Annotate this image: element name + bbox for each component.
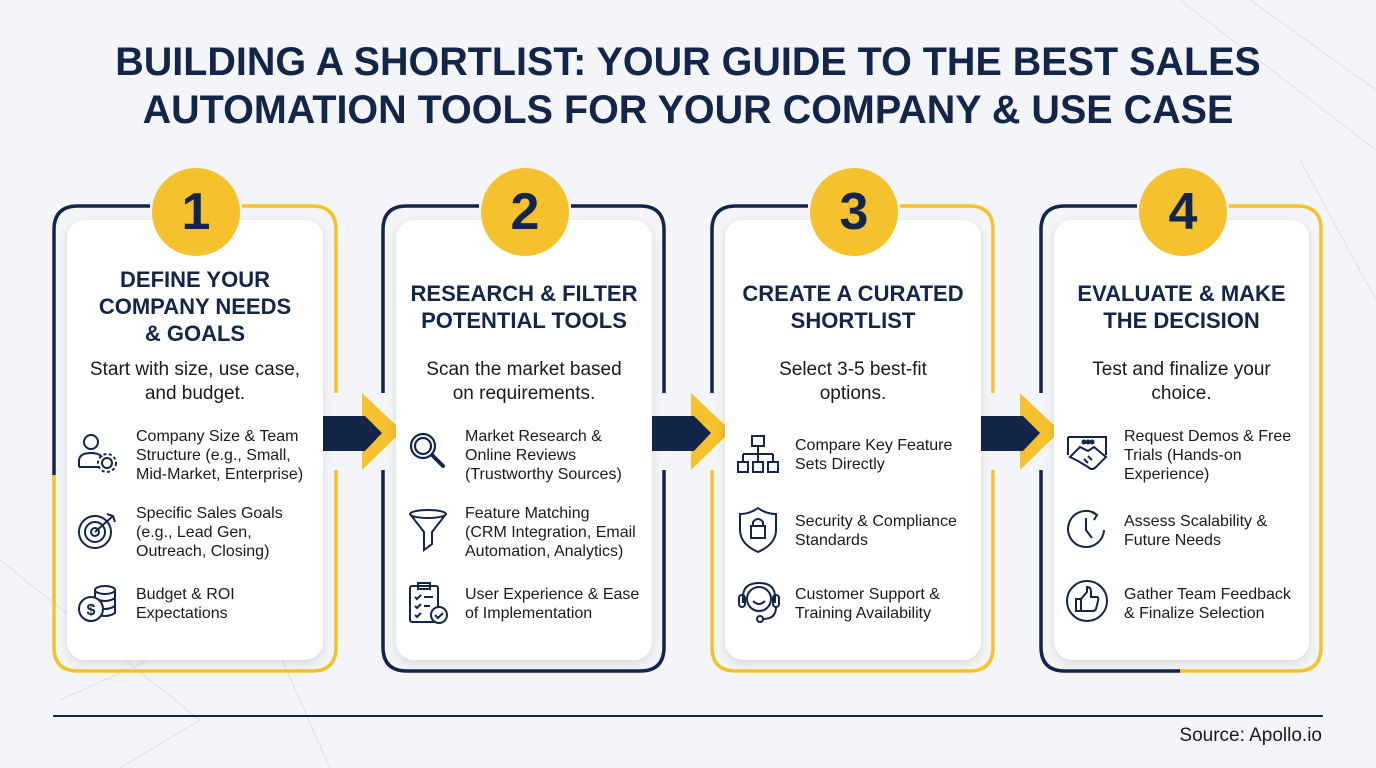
item: feature matching: Feature Matching xyxy=(465,505,590,522)
item: team feedback xyxy=(1066,580,1291,622)
subtext 4 xyxy=(1092,359,1271,404)
title: BUILDING A SHORTLIST: YOUR GUIDE TO THE BEST SALES xyxy=(115,40,1261,84)
icon: handshake screen xyxy=(1067,436,1108,470)
item: security xyxy=(739,506,957,554)
panel 4 xyxy=(1054,220,1309,660)
item: user experience: User Experience & Ease xyxy=(465,586,639,603)
number 1: 1 xyxy=(182,183,210,241)
frame 1 xyxy=(54,206,336,671)
item: demos: Request Demos & Free xyxy=(1124,428,1291,445)
number 1 xyxy=(152,168,240,256)
subtext 4: Test and finalize your xyxy=(1092,359,1271,380)
item: sales goals: Specific Sales Goals xyxy=(136,505,283,522)
heading 3: SHORTLIST xyxy=(791,308,915,333)
item: company size: Company Size & Team xyxy=(136,428,298,445)
heading 4 xyxy=(1077,281,1286,333)
arrow 1 xyxy=(323,393,402,470)
item: feature matching: (CRM Integration, Email xyxy=(465,524,636,541)
item: scalability: Assess Scalability & xyxy=(1124,513,1267,530)
item: security: Security & Compliance xyxy=(795,513,957,530)
number 3: 3 xyxy=(840,183,868,241)
item: compare features: Compare Key Feature xyxy=(795,437,952,454)
number 2 xyxy=(481,168,569,256)
item: demos: Trials (Hands-on xyxy=(1124,447,1242,464)
item: budget: Expectations xyxy=(136,605,228,622)
icon: target xyxy=(78,513,116,549)
number 4: 4 xyxy=(1169,183,1197,241)
item: sales goals xyxy=(78,505,283,560)
icon: person gear xyxy=(78,434,117,473)
item: sales goals: Outreach, Closing) xyxy=(136,543,269,560)
heading 4: THE DECISION xyxy=(1103,308,1260,333)
item: market research: (Trustworthy Sources) xyxy=(465,466,622,483)
panel 2 xyxy=(396,220,652,660)
subtext 3 xyxy=(779,359,927,404)
item: company size xyxy=(78,428,303,483)
source: Source: Apollo.io xyxy=(1179,725,1322,746)
number 3 xyxy=(810,168,898,256)
item: sales goals: (e.g., Lead Gen, xyxy=(136,524,252,541)
icon: headset xyxy=(738,582,780,623)
item: company size: Mid-Market, Enterprise) xyxy=(136,466,303,483)
number 2: 2 xyxy=(511,183,539,241)
heading 2: POTENTIAL TOOLS xyxy=(421,308,627,333)
item: market research: Market Research & xyxy=(465,428,602,445)
item: compare features: Sets Directly xyxy=(795,456,885,473)
frame 2 xyxy=(383,206,664,671)
icon: clock xyxy=(1066,510,1105,548)
item: customer support: Customer Support & xyxy=(795,586,940,603)
item: feature matching: Automation, Analytics) xyxy=(465,543,623,560)
subtext 2: Scan the market based xyxy=(426,359,622,380)
item: customer support xyxy=(738,582,940,623)
title: AUTOMATION TOOLS FOR YOUR COMPANY & USE CASE xyxy=(143,88,1233,132)
icon: magnifier xyxy=(410,432,446,468)
subtext 1: and budget. xyxy=(145,383,245,404)
panel 1 xyxy=(67,220,323,660)
item: demos xyxy=(1067,428,1291,483)
item: market research: Online Reviews xyxy=(465,447,576,464)
item: team feedback: Gather Team Feedback xyxy=(1124,586,1291,603)
subtext 2 xyxy=(426,359,622,404)
item: user experience xyxy=(409,582,639,624)
heading 2: RESEARCH & FILTER xyxy=(411,281,637,306)
item: security: Standards xyxy=(795,532,868,549)
icon: thumbs up xyxy=(1066,580,1108,622)
item: scalability: Future Needs xyxy=(1124,532,1221,549)
heading 1: DEFINE YOUR xyxy=(120,267,270,292)
heading 2 xyxy=(411,281,637,333)
icon: coins xyxy=(78,585,116,622)
item: team feedback: & Finalize Selection xyxy=(1124,605,1265,622)
heading 1 xyxy=(99,267,291,346)
item: market research xyxy=(410,428,622,483)
item: demos: Experience) xyxy=(1124,466,1209,483)
panel 3 xyxy=(725,220,981,660)
heading 3: CREATE A CURATED xyxy=(742,281,964,306)
footer line xyxy=(53,715,1323,717)
item: company size: Structure (e.g., Small, xyxy=(136,447,291,464)
heading 1: COMPANY NEEDS xyxy=(99,294,291,319)
subtext 2: on requirements. xyxy=(453,383,595,404)
item: compare features xyxy=(737,435,952,473)
heading 4: EVALUATE & MAKE xyxy=(1077,281,1286,306)
item: budget: Budget & ROI xyxy=(136,586,235,603)
item: feature matching xyxy=(409,505,636,560)
subtext 3: options. xyxy=(820,383,886,404)
icon: hierarchy xyxy=(737,435,779,473)
title xyxy=(115,40,1261,132)
heading 3 xyxy=(742,281,964,333)
icon: funnel xyxy=(409,509,447,552)
item: budget xyxy=(78,585,235,622)
frame 3 xyxy=(712,206,993,671)
frame 4 xyxy=(1041,206,1321,671)
icon: clipboard check xyxy=(409,582,448,624)
icon: shield lock xyxy=(739,506,777,554)
icon: coins: $ xyxy=(87,602,96,619)
subtext 1: Start with size, use case, xyxy=(90,359,300,380)
item: customer support: Training Availability xyxy=(795,605,931,622)
subtext 1 xyxy=(90,359,300,404)
item: scalability xyxy=(1066,510,1267,549)
subtext 4: choice. xyxy=(1151,383,1212,404)
arrow 3 xyxy=(981,393,1060,470)
heading 1: & GOALS xyxy=(145,321,245,346)
item: user experience: of Implementation xyxy=(465,605,592,622)
arrow 2 xyxy=(652,393,731,470)
number 4 xyxy=(1139,168,1227,256)
subtext 3: Select 3-5 best-fit xyxy=(779,359,927,380)
